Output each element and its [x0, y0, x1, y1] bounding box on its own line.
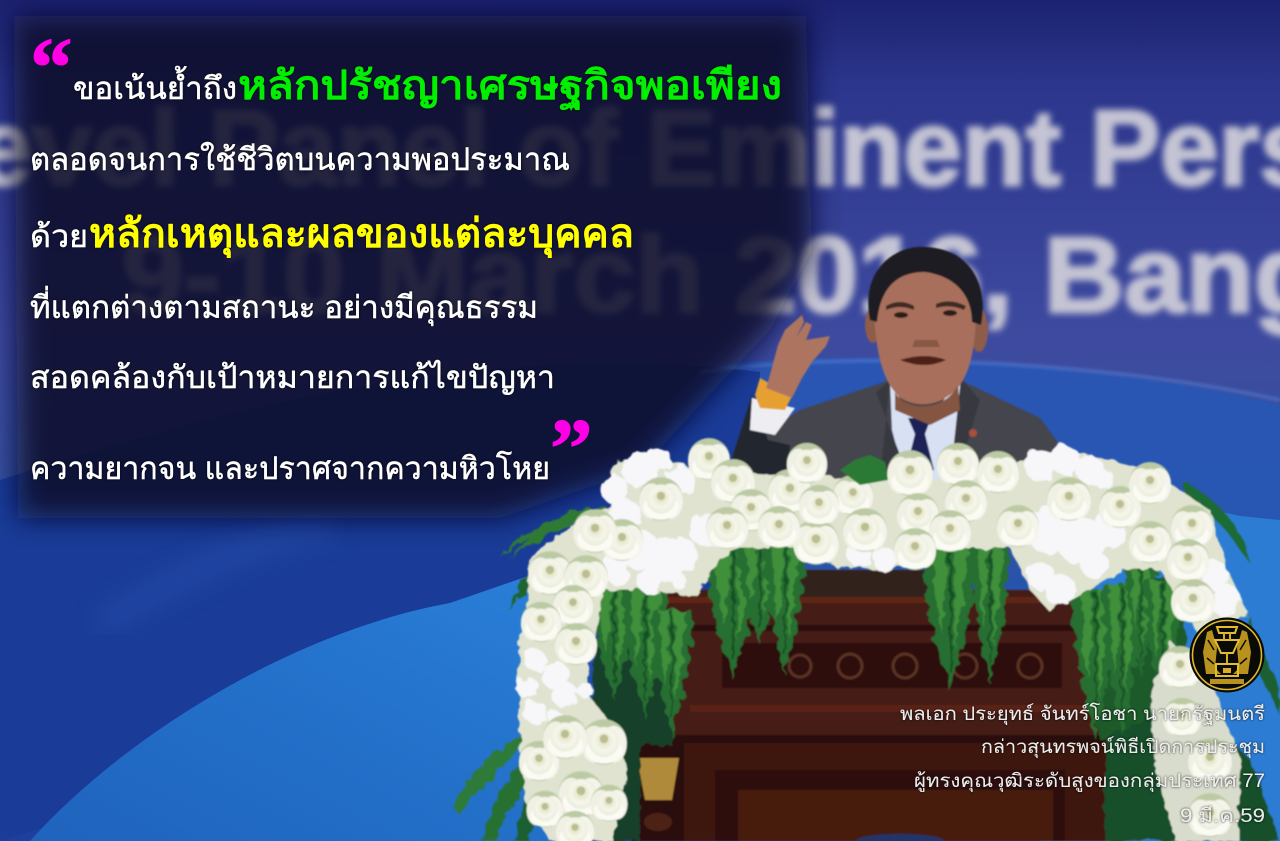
lectern [632, 570, 1112, 841]
quote text [30, 21, 782, 496]
caption: speaker and event [900, 702, 1265, 827]
white orchids [517, 445, 1241, 726]
line 1: ขอเน้นย้ำถึง [73, 66, 237, 106]
caption line 2: กล่าวสุนทรพจน์พิธีเปิดการประชุม [981, 736, 1265, 759]
line 1 [73, 64, 782, 112]
photo: speaker at the lectern [452, 247, 1280, 841]
line 3: ด้วย [30, 219, 88, 254]
icon: government emblem [1190, 618, 1264, 692]
line 6: ความยากจน และปราศจากความหิวโหย [30, 451, 550, 486]
leaves above garland [840, 455, 888, 485]
line 5: สอดคล้องกับเป้าหมายการแก้ไขปัญหา [30, 360, 555, 395]
fern: green fronds [452, 482, 1280, 841]
caption line 4: 9 มี.ค.59 [1180, 805, 1265, 827]
panel: dark quote backdrop [14, 16, 812, 518]
gold ornament [637, 758, 679, 800]
garland mass [518, 450, 1248, 841]
closing quote mark: ” [550, 402, 592, 496]
opening quote mark: “ [30, 21, 72, 115]
line 4: ที่แตกต่างตามสถานะ อย่างมีคุณธรรม [30, 286, 538, 327]
line 3: หลักเหตุและผลของแต่ละบุคคล [89, 212, 634, 259]
banner: blurred backdrop text [0, 87, 1280, 335]
line 2: ตลอดจนการใช้ชีวิตบนความพอประมาณ [30, 142, 570, 177]
banner: blurred backdrop text: 9-10 March 2016, Bang [122, 214, 1280, 335]
speaker figure [732, 247, 1062, 490]
lotus flowers [519, 438, 1232, 841]
caption line 3: ผู้ทรงคุณวุฒิระดับสูงของกลุ่มประเทศ 77 [914, 771, 1265, 793]
line 1: หลักปรัชญาเศรษฐกิจพอเพียง [238, 64, 782, 112]
caption line 1: พลเอก ประยุทธ์ จันทร์โอชา นายกรัฐมนตรี [900, 702, 1265, 726]
